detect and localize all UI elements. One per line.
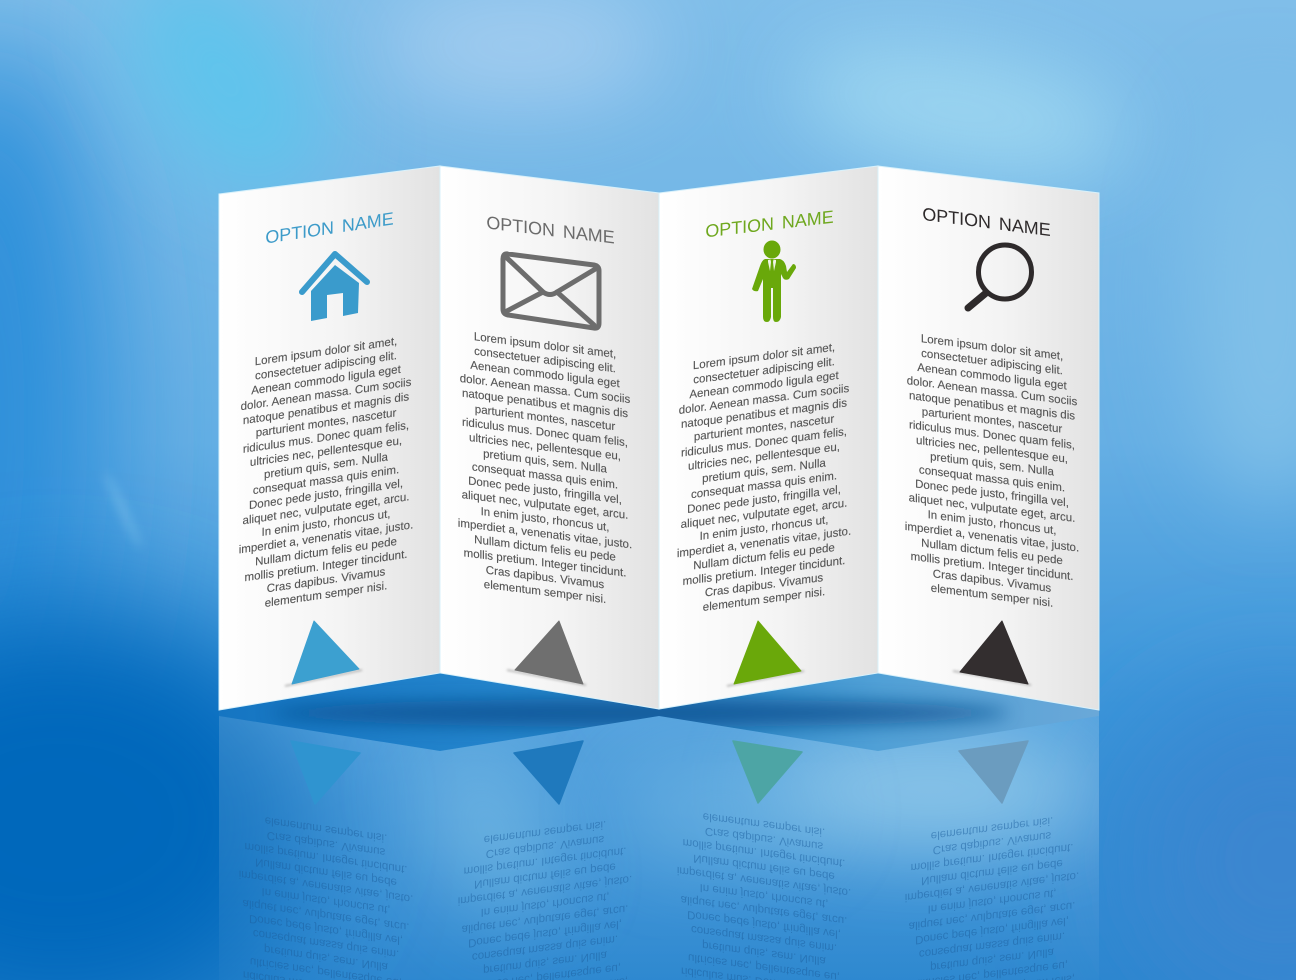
body text: option 2: dolor. Aenean massa. Cum sociis	[460, 373, 630, 406]
body text: option 1: elementum semper nisi.	[265, 579, 387, 610]
icon: magnifier	[968, 245, 1032, 308]
reflected text panel 1	[239, 810, 413, 980]
body text: option 3: parturient montes, nascetur	[694, 413, 834, 444]
reflection tint	[219, 716, 1099, 954]
reflection of brochure	[219, 714, 1100, 980]
body text: option 2: parturient montes, nascetur	[475, 404, 615, 433]
body text: option 4: ultricies nec, pellentesque eu,	[916, 435, 1068, 466]
body text: option 2: ridiculus mus. Donec quam felis,	[462, 417, 628, 449]
body text: option 2: pretium quis, sem. Nulla	[483, 448, 607, 476]
reflected text panel 1: consequat massa quis enim.	[253, 927, 399, 961]
body text: option 2: Cras dapibus. Vivamus	[486, 565, 604, 591]
reflected text panel 4: mollis pretium. Integer tincidunt.	[911, 841, 1073, 873]
body text: option 1: Lorem ipsum dolor sit amet,	[255, 335, 397, 368]
reflected text panel 1: mollis pretium. Integer tincidunt.	[244, 840, 408, 876]
reflected text panel 1: aliquet nec, vulputate eget, arcu.	[243, 897, 409, 934]
body text: option 3: In enim justo, rhoncus ut,	[700, 514, 828, 543]
reflected text panel 3: Cras dapibus. Vivamus	[705, 825, 823, 852]
body text: option 3: aliquet nec, vulputate eget, arcu.	[681, 498, 847, 531]
icon: house	[302, 254, 367, 321]
body text: option 1: consequat massa quis enim.	[253, 463, 399, 497]
reflected text panel 4: Cras dapibus. Vivamus	[933, 829, 1051, 856]
body text: option 2: consequat massa quis enim.	[472, 461, 618, 492]
body text: option 3: mollis pretium. Integer tincidunt.	[683, 555, 845, 588]
body text: option 3: pretium quis, sem. Nulla	[702, 457, 826, 485]
reflected text panel 3: aliquet nec, vulputate eget, arcu.	[681, 893, 847, 926]
body text: option 1: consectetuer adipiscing elit.	[255, 349, 397, 383]
reflected text panel 3: pretium quis, sem. Nulla	[702, 939, 826, 967]
body text: option 1: Aenean commodo ligula eget	[251, 363, 402, 397]
body text: option 3: Cras dapibus. Vivamus	[705, 572, 823, 599]
reflected text panel 2: mollis pretium. Integer tincidunt.	[464, 844, 626, 877]
body text: option 2: Lorem ipsum dolor sit amet,	[474, 331, 616, 361]
body text: option 4: natoque penatibus et magnis dis	[909, 390, 1075, 423]
body text: option 1: aliquet nec, vulputate eget, arcu.	[243, 490, 409, 527]
body text: option 4: aliquet nec, vulputate eget, arcu.	[909, 492, 1075, 525]
body text: option 3	[677, 340, 851, 617]
body text: option 3: Lorem ipsum dolor sit amet,	[693, 342, 835, 372]
heading: option 3: OPTION NAME	[705, 207, 834, 241]
body text: option 3: imperdiet a, venenatis vitae, justo.	[677, 526, 851, 560]
body text: option 4: dolor. Aenean massa. Cum sociis	[907, 375, 1077, 408]
reflected text panel 3: mollis pretium. Integer tincidunt.	[683, 836, 845, 869]
reflected text panel 4: Donec pede justo, fringilla vel,	[915, 914, 1069, 946]
body text: option 2	[458, 329, 632, 609]
body text: option 2: In enim justo, rhoncus ut,	[481, 506, 609, 534]
body text: option 1: ultricies nec, pellentesque eu,	[250, 434, 402, 469]
body text: option 4: Donec pede justo, fringilla vel,	[915, 478, 1069, 510]
reflected text panel 4: aliquet nec, vulputate eget, arcu.	[909, 899, 1075, 932]
reflected text panel 3: consequat massa quis enim.	[691, 923, 837, 954]
panel: option 4	[878, 166, 1099, 710]
body text: option 3: consectetuer adipiscing elit.	[693, 356, 835, 386]
body text: option 1: Nullam dictum felis eu pede	[255, 535, 397, 568]
body text: option 2: imperdiet a, venenatis vitae, justo.	[458, 518, 632, 551]
body text: option 3: ultricies nec, pellentesque eu,	[688, 441, 840, 473]
body text: option 3: natoque penatibus et magnis dis	[681, 397, 847, 431]
body text: option 4: mollis pretium. Integer tincidunt.	[911, 551, 1073, 583]
body text: option 4: Aenean commodo ligula eget	[917, 362, 1067, 393]
reflected text panel 2: Donec pede justo, fringilla vel,	[468, 917, 622, 949]
body text: option 3: Donec pede justo, fringilla vel,	[687, 484, 841, 516]
body text: option 3: Nullam dictum felis eu pede	[693, 542, 835, 572]
reflected text panel 2: pretium quis, sem. Nulla	[483, 948, 607, 976]
reflected triangles	[291, 741, 1028, 804]
reflected text panel 1: Donec pede justo, fringilla vel,	[249, 912, 403, 947]
body text: option 4: In enim justo, rhoncus ut,	[928, 509, 1056, 537]
reflected text panel 1: imperdiet a, venenatis vitae, justo.	[239, 867, 413, 906]
panel: option 1	[219, 166, 440, 710]
reflected text panel 2	[458, 815, 632, 980]
body text: option 1: dolor. Aenean massa. Cum sociis	[241, 376, 412, 413]
body text: option 4	[905, 331, 1079, 613]
reflected text panel 2: Cras dapibus. Vivamus	[486, 833, 604, 859]
body text: option 1: parturient montes, nascetur	[256, 406, 396, 440]
arrow: triangle 3	[727, 621, 804, 686]
body text: option 4: Nullam dictum felis eu pede	[921, 538, 1063, 567]
reflected text panel 1: pretium quis, sem. Nulla	[264, 943, 388, 974]
reflected text panel 4: Nullam dictum felis eu pede	[921, 857, 1063, 886]
icon: person	[752, 240, 796, 322]
body text: option 3: Aenean commodo ligula eget	[689, 370, 839, 401]
reflected text panel 3: Nullam dictum felis eu pede	[693, 852, 835, 882]
body text: option 1: mollis pretium. Integer tincidunt.	[244, 548, 408, 584]
reflected text panel 3: In enim justo, rhoncus ut,	[700, 881, 828, 910]
reflected text panel 1: Cras dapibus. Vivamus	[267, 829, 385, 859]
reflected text panel 4: In enim justo, rhoncus ut,	[928, 887, 1056, 915]
body text: option 4: Lorem ipsum dolor sit amet,	[921, 333, 1063, 363]
body text: option 4: elementum semper nisi.	[931, 583, 1053, 610]
body text: option 2: Aenean commodo ligula eget	[470, 360, 620, 390]
reflected text panel 2: In enim justo, rhoncus ut,	[481, 890, 609, 918]
body text: option 4: pretium quis, sem. Nulla	[930, 451, 1054, 479]
reflected text panel 2: consequat massa quis enim.	[472, 932, 618, 963]
reflected text panel 3: elementum semper nisi.	[703, 810, 825, 838]
body text: option 1: imperdiet a, venenatis vitae, justo.	[239, 518, 413, 557]
reflected text panel 2: elementum semper nisi.	[484, 818, 606, 845]
body text: option 2: Donec pede justo, fringilla vel,	[468, 475, 622, 507]
reflected text panel 2: imperdiet a, venenatis vitae, justo.	[458, 873, 632, 906]
body text: option 1: ridiculus mus. Donec quam felis,	[243, 419, 409, 456]
body text: option 3: dolor. Aenean massa. Cum sociis	[679, 383, 849, 417]
reflected text panel 4: elementum semper nisi.	[931, 814, 1053, 841]
body text: option 4: parturient montes, nascetur	[922, 406, 1062, 436]
arrow: triangle 4	[953, 621, 1031, 685]
reflected text panel 3	[677, 807, 851, 980]
panel: option 3	[659, 166, 878, 709]
body text: option 2: aliquet nec, vulputate eget, arcu.	[462, 489, 628, 522]
body text: option 3: ridiculus mus. Donec quam felis,	[681, 426, 847, 460]
body text: option 1: Cras dapibus. Vivamus	[267, 565, 385, 595]
body text: option 3: consequat massa quis enim.	[691, 470, 837, 501]
heading: option 1: OPTION NAME	[265, 208, 394, 248]
reflected text panel 2: Nullam dictum felis eu pede	[474, 860, 616, 890]
reflected text panel 1: Nullam dictum felis eu pede	[255, 856, 397, 889]
body text: option 2: mollis pretium. Integer tincidunt.	[464, 547, 626, 580]
reflected text panel 3: Donec pede justo, fringilla vel,	[687, 908, 841, 940]
body text: option 2: consectetuer adipiscing elit.	[474, 346, 616, 375]
body text: option 4: consequat massa quis enim.	[919, 464, 1065, 495]
icon: envelope	[503, 254, 599, 328]
arrow: triangle 1	[285, 621, 362, 686]
panel: option 2	[440, 166, 659, 709]
body text: option 1: natoque penatibus et magnis dis	[243, 390, 409, 427]
body text: option 4: Cras dapibus. Vivamus	[933, 568, 1051, 595]
reflected text panel 4: imperdiet a, venenatis vitae, justo.	[905, 869, 1079, 903]
reflected text panel 1: elementum semper nisi.	[265, 814, 387, 845]
body text: option 2: natoque penatibus et magnis dis	[462, 388, 628, 420]
body text: option 4: imperdiet a, venenatis vitae, justo.	[905, 521, 1079, 555]
reflection glow	[405, 723, 1100, 937]
body text: option 2: elementum semper nisi.	[484, 579, 606, 606]
body text: option 1	[239, 332, 413, 614]
body text: option 2: ultricies nec, pellentesque eu,	[469, 432, 621, 463]
heading: option 2: OPTION NAME	[486, 212, 615, 248]
body text: option 1: pretium quis, sem. Nulla	[264, 450, 388, 481]
reflected text panel 4	[905, 811, 1079, 980]
arrow: triangle 2	[507, 621, 586, 685]
floor shadow under brochure	[219, 673, 1099, 753]
body text: option 3: elementum semper nisi.	[703, 586, 825, 614]
reflected text panel 4: consequat massa quis enim.	[919, 929, 1065, 960]
reflected text panel 1: In enim justo, rhoncus ut,	[261, 885, 391, 917]
body text: option 1: Donec pede justo, fringilla vel,	[249, 477, 403, 512]
reflected text panel 4: pretium quis, sem. Nulla	[930, 945, 1054, 973]
body text: option 1: In enim justo, rhoncus ut,	[261, 507, 391, 539]
reflected text panel 3: imperdiet a, venenatis vitae, justo.	[677, 864, 851, 898]
body text: option 4: consectetuer adipiscing elit.	[921, 348, 1063, 377]
heading: option 4: OPTION NAME	[922, 204, 1051, 240]
body text: option 2: Nullam dictum felis eu pede	[474, 534, 616, 564]
reflected text panel 2: aliquet nec, vulputate eget, arcu.	[462, 902, 628, 935]
body text: option 4: ridiculus mus. Donec quam felis,	[909, 419, 1075, 452]
